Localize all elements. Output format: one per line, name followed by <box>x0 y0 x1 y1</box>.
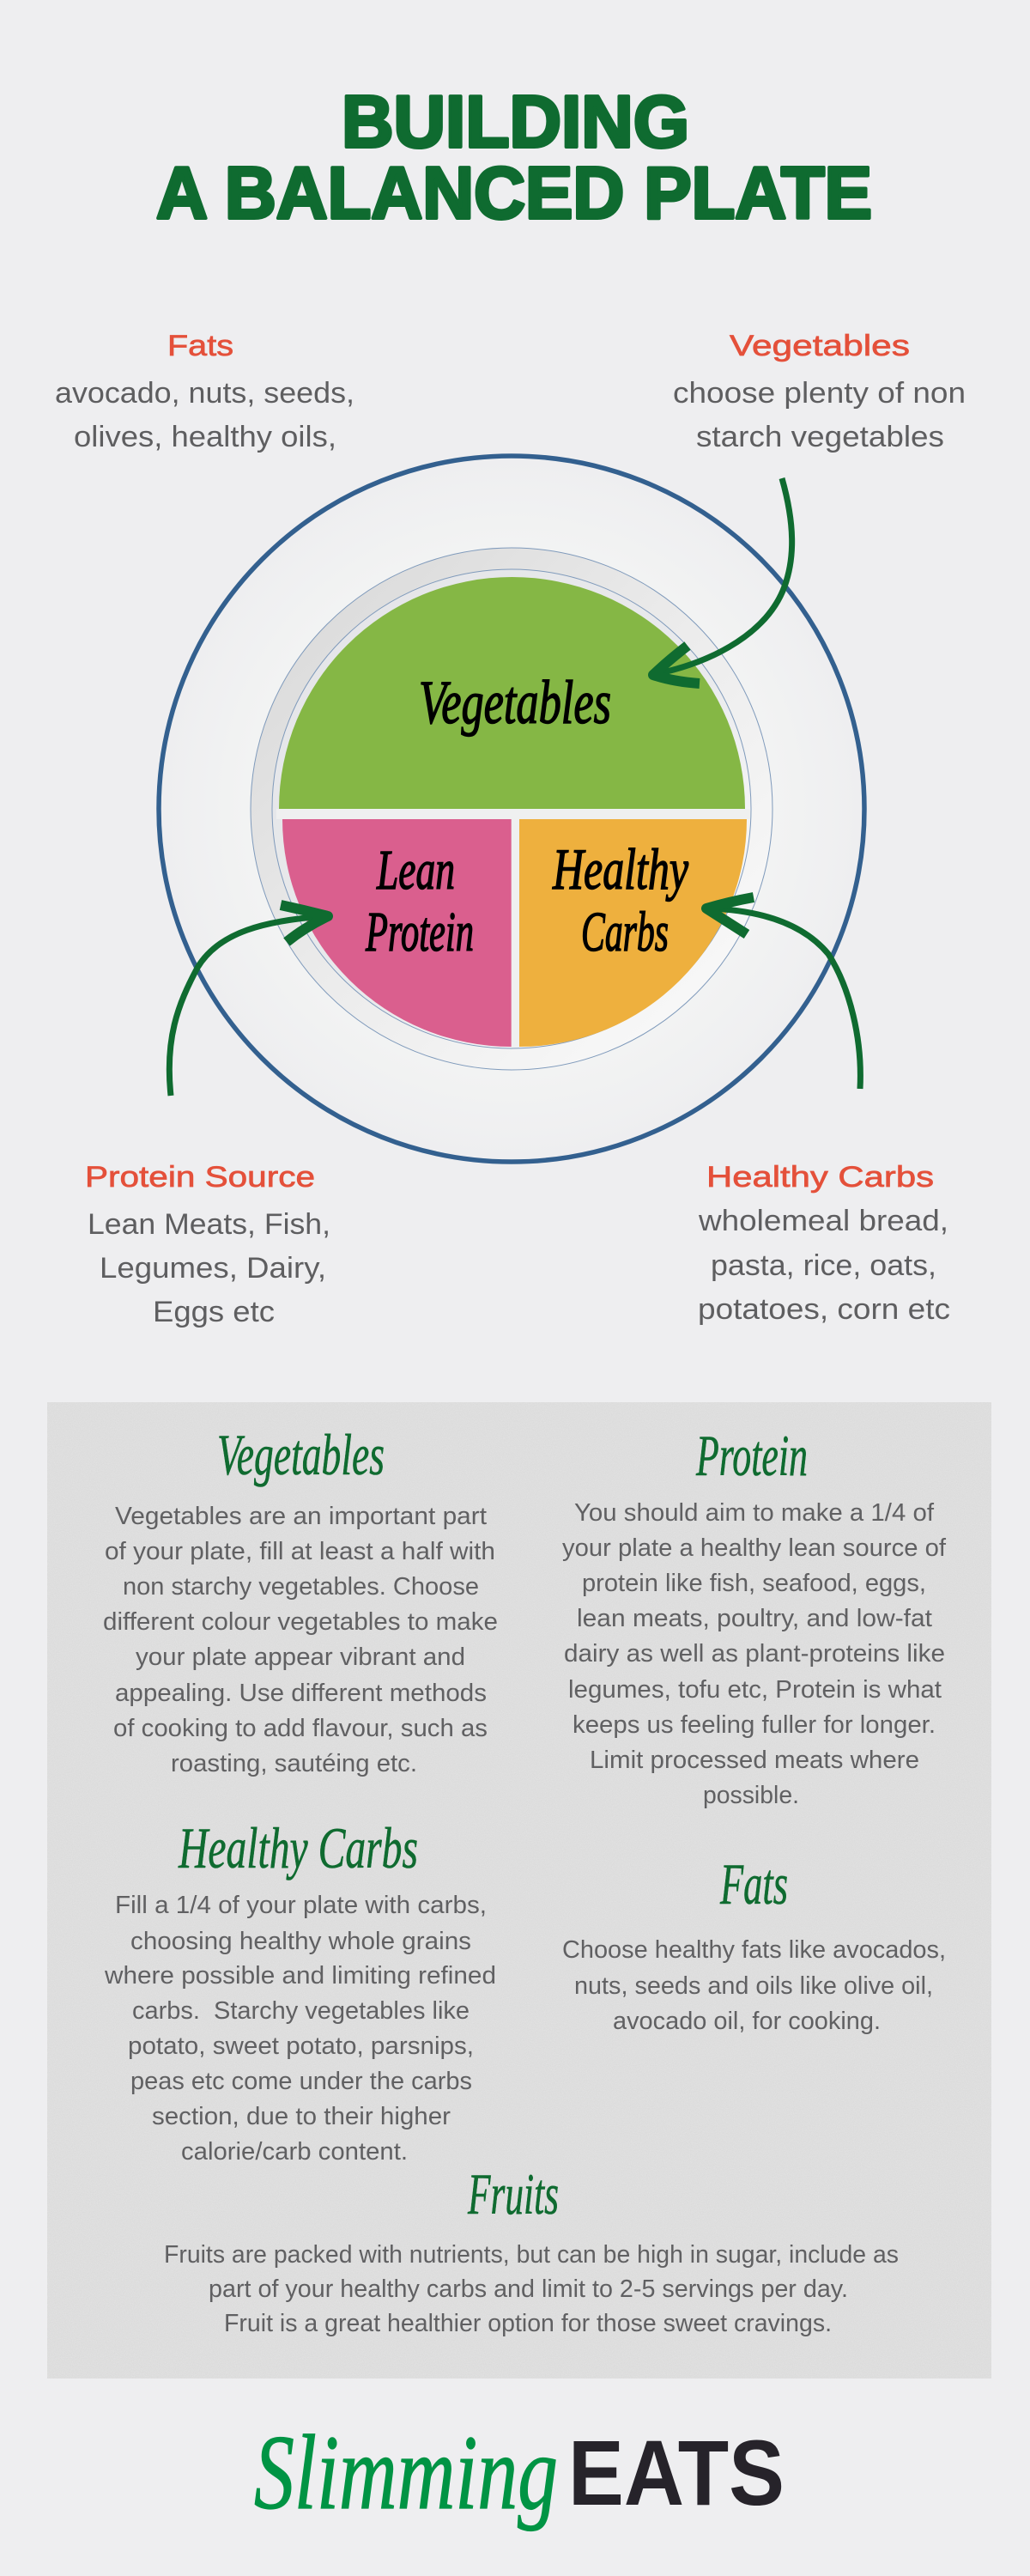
callout: vegetables: choose plenty of non <box>673 377 966 410</box>
section: healthy carbs: choosing healthy whole grains <box>130 1928 471 1955</box>
section: protein: dairy as well as plant-proteins like <box>564 1640 945 1668</box>
section: protein: Limit processed meats where <box>590 1747 919 1774</box>
segment: healthy carbs: Healthy <box>552 836 689 902</box>
segment: vegetables: Vegetables <box>419 668 611 737</box>
section: protein: keeps us feeling fuller for longer. <box>573 1711 936 1739</box>
section: vegetables: roasting, sautéing etc. <box>171 1750 417 1777</box>
segment: healthy carbs: Carbs <box>581 901 669 963</box>
section: healthy carbs: where possible and limiting refined <box>104 1962 496 1990</box>
section: fats: avocado oil, for cooking. <box>613 2008 881 2035</box>
section: protein: lean meats, poultry, and low-fat <box>577 1605 932 1632</box>
section: healthy carbs: section, due to their higher <box>152 2103 451 2130</box>
section: vegetables: Vegetables are an important part <box>115 1503 487 1530</box>
section: vegetables: different colour vegetables to make <box>103 1608 498 1636</box>
plate dish <box>272 569 751 1048</box>
title: BUILDING <box>342 82 689 163</box>
title <box>156 82 872 234</box>
callout: fats: olives, healthy oils, <box>74 421 336 453</box>
callout: protein source: Legumes, Dairy, <box>100 1252 326 1285</box>
section: healthy carbs: potato, sweet potato, parsnips, <box>128 2032 474 2060</box>
section: vegetables: your plate appear vibrant and <box>136 1643 465 1671</box>
segment: lean protein: Protein <box>365 901 474 963</box>
section: fruits: Fruit is a great healthier option for those sweet cravings. <box>224 2310 832 2337</box>
callout: vegetables <box>673 330 966 453</box>
callout: fats: avocado, nuts, seeds, <box>55 377 354 410</box>
section: protein: You should aim to make a 1/4 of <box>574 1499 935 1527</box>
callout: healthy carbs <box>698 1161 950 1326</box>
segment: healthy carbs <box>519 819 747 1047</box>
segment: vegetables <box>279 577 745 809</box>
section: protein: possible. <box>703 1782 799 1809</box>
arrow: vegetables <box>653 478 792 683</box>
arrow: carbs <box>706 897 860 1089</box>
callout: protein source: Eggs etc <box>153 1296 275 1328</box>
section: protein: protein like fish, seafood, eggs, <box>582 1570 926 1597</box>
section: fruits: Fruits are packed with nutrients, but can be high in sugar, include as <box>164 2241 899 2269</box>
callout: healthy carbs: Healthy Carbs <box>706 1161 934 1194</box>
segment: lean protein: Lean <box>376 839 455 902</box>
section: fats: nuts, seeds and oils like olive oil, <box>574 1972 933 2000</box>
section: healthy carbs: peas etc come under the carbs <box>130 2068 472 2095</box>
arrow: protein <box>169 905 328 1096</box>
plate outer ring <box>159 456 864 1162</box>
section: fats: Fats <box>719 1851 788 1917</box>
callout: vegetables: Vegetables <box>730 330 910 362</box>
section: protein: Protein <box>695 1423 808 1488</box>
section: healthy carbs: Healthy Carbs <box>178 1815 418 1880</box>
section: vegetables: of cooking to add flavour, such as <box>113 1715 488 1742</box>
callout: healthy carbs: wholemeal bread, <box>698 1205 948 1237</box>
segment: lean protein <box>282 819 512 1047</box>
section: protein: your plate a healthy lean source of <box>562 1534 947 1562</box>
panel: nutrition details <box>47 1402 991 2379</box>
section: vegetables <box>103 1422 498 1777</box>
section: protein <box>562 1423 947 1809</box>
logo: Slimming Eats: EATS <box>568 2421 785 2524</box>
section: vegetables: non starchy vegetables. Choose <box>123 1573 479 1601</box>
section: vegetables: of your plate, fill at least a half with <box>105 1538 495 1565</box>
plate diagram <box>159 456 864 1162</box>
section: fruits: part of your healthy carbs and limit to 2-5 servings per day. <box>209 2275 848 2303</box>
callout: healthy carbs: pasta, rice, oats, <box>711 1249 936 1282</box>
divider band <box>276 809 750 1048</box>
section: vegetables: appealing. Use different methods <box>115 1680 487 1707</box>
callout: fats: Fats <box>167 330 233 362</box>
section: healthy carbs: calorie/carb content. <box>181 2138 408 2166</box>
callout: protein source: Protein Source <box>85 1161 315 1194</box>
section: healthy carbs: Fill a 1/4 of your plate with carbs, <box>115 1892 487 1919</box>
logo: Slimming Eats: Slimming <box>254 2414 558 2531</box>
section: fats <box>562 1851 946 2035</box>
section: healthy carbs: carbs. Starchy vegetables like <box>132 1997 470 2025</box>
section: fats: Choose healthy fats like avocados, <box>562 1936 946 1964</box>
callout: protein source: Lean Meats, Fish, <box>88 1208 330 1241</box>
callout: protein source <box>85 1161 330 1328</box>
section: vegetables: Vegetables <box>217 1422 385 1487</box>
section: fruits: Fruits <box>467 2161 559 2227</box>
section: fruits <box>164 2161 899 2337</box>
section: healthy carbs <box>104 1815 496 2166</box>
title: A BALANCED PLATE <box>156 153 872 234</box>
callout: vegetables: starch vegetables <box>696 421 944 453</box>
plate inner rim <box>251 548 772 1070</box>
callout: healthy carbs: potatoes, corn etc <box>698 1293 950 1326</box>
callout: fats <box>55 330 354 453</box>
section: protein: legumes, tofu etc, Protein is what <box>568 1676 942 1704</box>
